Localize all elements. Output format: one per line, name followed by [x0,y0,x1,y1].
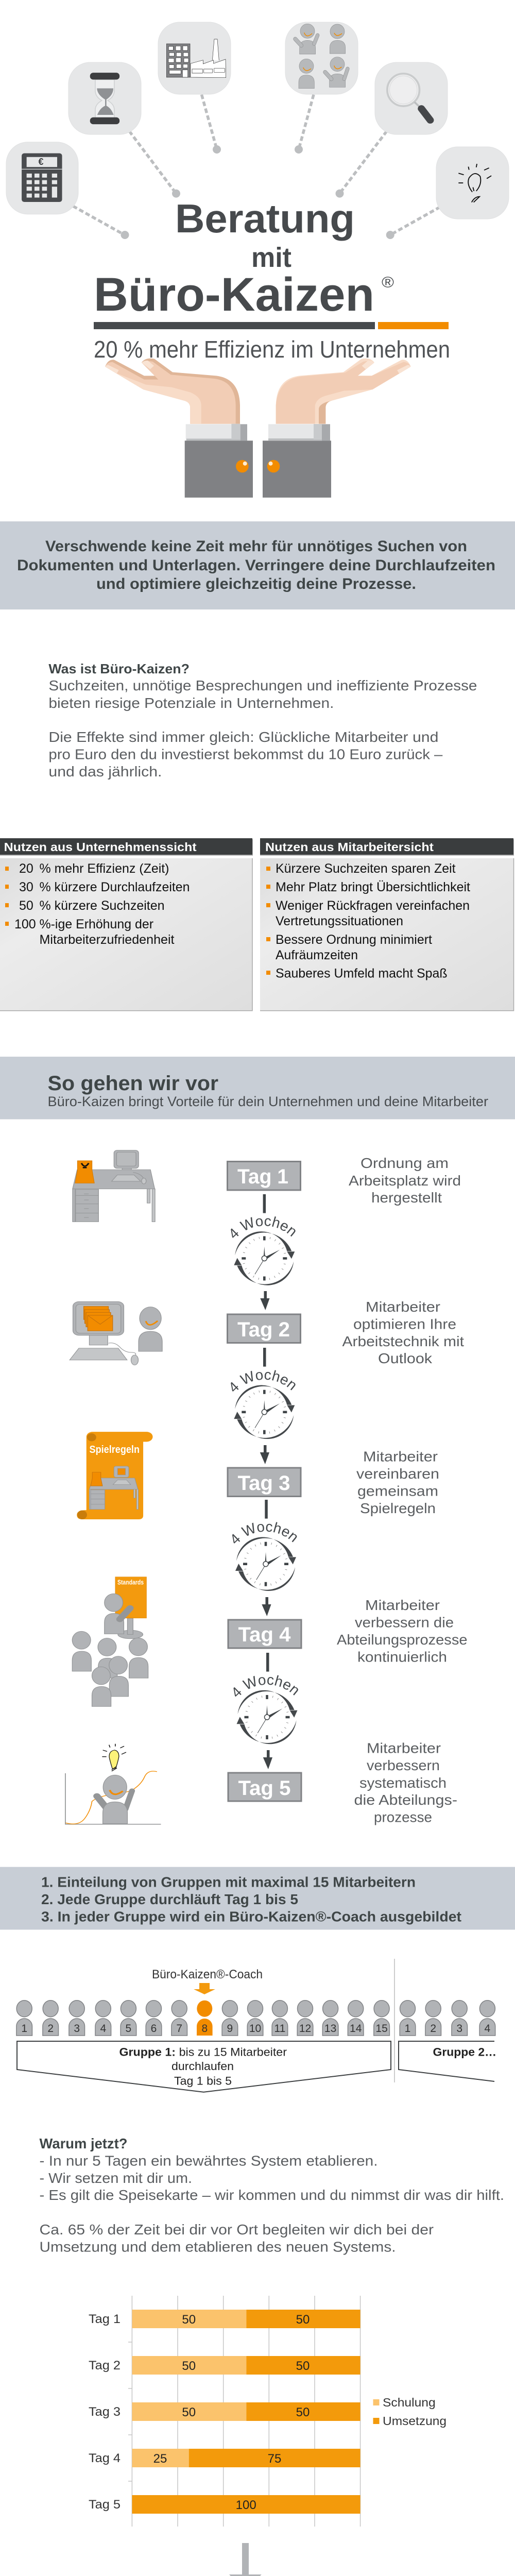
step: Tag 4: Tag 4 [238,1623,291,1646]
bar chart: Schulung vs Umsetzung [89,2296,447,2527]
left sleeve [185,440,253,498]
icon: email at computer [70,1302,162,1365]
step: Tag 2: Tag 2 [237,1318,290,1341]
step text: Tag 3 [356,1449,439,1516]
icon: magnifier [375,62,448,134]
step text: Tag 4: Mitarbeiter [365,1597,440,1613]
bar values: 50 [182,2313,196,2327]
title block [94,196,450,363]
icon: Spielregeln scroll [77,1432,153,1519]
heading: Was ist Büro-Kaizen? [48,661,190,676]
axis labels [89,2312,121,2512]
step text: Tag 5: Mitarbeiter [367,1740,441,1756]
step: Tag 1 [228,1161,301,1190]
icon: desk with computer [73,1150,155,1222]
icon: office and factory [158,22,231,94]
step text: Tag 5: prozesse [374,1809,432,1825]
paragraph: Die Effekte sind immer gleich: Glückliche Mitarbeiter und [48,729,438,745]
note [39,2222,434,2255]
panel body [0,858,252,1011]
connector [263,1194,266,1213]
panel header [0,838,253,856]
rules list [41,1874,461,1925]
step: Tag 5 [228,1773,301,1801]
legend [373,2396,447,2428]
bracket group 2 [399,2041,494,2081]
reasons: - In nur 5 Tagen ein bewährtes System etablieren. [39,2153,377,2169]
paragraph: pro Euro den du investierst bekommst du 10 Euro zurück – [48,747,443,762]
arrow: large down [229,2543,262,2576]
paragraph: bieten riesige Potenziale in Unternehmen. [48,695,334,711]
logo bar orange [378,322,449,329]
group 2 label: Gruppe 2… [433,2046,496,2059]
group 1 label: durchlaufen [171,2060,234,2073]
connector dots [121,145,394,239]
paragraph: und das jährlich. [48,764,162,779]
left cuff [186,424,247,440]
bullets [266,867,270,975]
step text: Tag 4: Abteilungsprozesse [337,1632,468,1648]
clock: 4 Wochen [231,1216,296,1285]
text block: Was ist Büro-Kaizen [48,661,477,779]
right cuff [268,424,330,440]
group 1 people: 4 [100,2023,106,2035]
rules list: 2. Jede Gruppe durchläuft Tag 1 bis 5 [41,1891,298,1907]
group 1 people [16,2001,389,2036]
axis labels: Tag 5 [89,2498,121,2512]
list: Aufräumzeiten [276,948,358,962]
list [14,861,190,947]
list: % mehr Effizienz (Zeit) [39,861,169,876]
icon: calculator: € [38,157,44,167]
axis labels: Tag 4 [89,2451,121,2465]
step: Tag 4 [228,1620,301,1648]
step text: Tag 2: Arbeitstechnik mit [342,1333,464,1349]
note: Ca. 65 % der Zeit bei dir vor Ort begleiten wir dich bei der [39,2222,434,2238]
group 1 people: 5 [126,2023,131,2035]
step text: Tag 3: gemeinsam [357,1483,438,1499]
banner: group rules [0,1867,515,1930]
step text: Tag 5 [354,1740,457,1825]
axis labels: Tag 1 [89,2312,121,2326]
title: mit: mit [251,242,291,273]
group 1 label: Tag 1 bis 5 [174,2074,232,2087]
group 1 label [119,2046,287,2087]
arrow [262,1597,271,1616]
connector [266,1653,269,1672]
group 1 people: 15 [375,2023,388,2035]
coach arrow [194,1983,215,1994]
group 1 people: 11 [274,2023,285,2035]
step text: Tag 4: verbessern die [355,1615,454,1631]
panel header: Nutzen aus Mitarbeitersicht [265,840,434,854]
diagram: groups [16,1959,496,2092]
group 1 people: 2 [47,2023,54,2035]
coach label: Büro-Kaizen®-Coach [152,1968,263,1981]
group 1 people: 14 [350,2023,362,2035]
reasons [39,2153,504,2203]
illustration: open hands [105,359,411,498]
panel header [260,838,514,856]
group 1 people: 7 [176,2023,182,2035]
rules list: 1. Einteilung von Gruppen mit maximal 15 Mitarbeitern [41,1874,416,1890]
connector [263,1348,266,1367]
arrow [260,1291,270,1310]
right hand [276,359,411,424]
step: Tag 5: Tag 5 [238,1777,290,1800]
icon: idea and growth curve [65,1744,161,1824]
title: Beratung: Beratung [175,196,355,241]
bar values: 50 [182,2359,196,2373]
step text: Tag 3: Spielregeln [360,1500,436,1516]
registered mark: ® [382,274,394,291]
step text: Tag 4 [337,1597,468,1665]
step text: Tag 1: hergestellt [371,1190,442,1206]
banner text [17,538,495,592]
step text: Tag 2 [342,1299,464,1366]
list: %-ige Erhöhung der [39,917,153,931]
subheading: Büro-Kaizen bringt Vorteile für dein Unternehmen und deine Mitarbeiter [47,1094,488,1109]
list: % kürzere Suchzeiten [39,899,165,913]
clock: 4 Wochen [232,1522,297,1591]
group 2 people [400,2001,495,2036]
step text: Tag 4: kontinuierlich [357,1649,447,1665]
group 1 label: Gruppe 1: [119,2046,176,2059]
step text: Tag 5: die Abteilungs- [354,1792,457,1808]
right button [267,460,280,472]
reasons: - Wir setzen mit dir um. [39,2170,192,2186]
text block: Warum jetzt [39,2136,504,2255]
bullets [5,867,9,926]
step text: Tag 3: Mitarbeiter [363,1449,438,1465]
list: 100 [14,917,36,931]
clock: 4 Wochen: 4 Wochen [231,1370,296,1392]
note: Umsetzung und dem etablieren des neuen Systems. [39,2239,396,2255]
connector [265,1500,268,1519]
left hand [105,359,240,424]
heading: Warum jetzt? [39,2136,128,2151]
icon: Standards presentation [72,1577,148,1706]
heading: So gehen wir vor [47,1072,218,1095]
group 1 people: 8 [201,2023,208,2035]
step text: Tag 5: verbessern [367,1757,440,1773]
bar values: 25 [153,2452,167,2466]
step: Tag 3: Tag 3 [238,1472,290,1495]
list: % kürzere Durchlaufzeiten [39,880,190,894]
bar values: 100 [236,2498,256,2512]
icon: happy team [285,22,358,94]
arrow [263,1750,272,1769]
legend: Schulung [383,2396,436,2409]
list [276,861,470,981]
group 1 people: 6 [151,2023,157,2035]
group 2 people: 3 [456,2023,462,2035]
step text: Tag 1 [349,1155,461,1206]
group 1 people: 12 [299,2023,311,2035]
icon: hourglass [68,62,141,134]
banner text: und optimiere gleichzeitig deine Prozesse. [96,575,416,592]
reasons: - Es gilt die Speisekarte – wir kommen und du nimmst dir was dir hilft. [39,2187,504,2203]
axis labels: Tag 3 [89,2405,121,2419]
group 2 people: 1 [405,2023,410,2035]
step: Tag 3 [228,1468,301,1496]
right sleeve [263,440,331,498]
banner: So gehen wir vor [0,1057,515,1119]
panel header: Nutzen aus Unternehmenssicht [4,840,197,854]
bar values: 50 [296,2313,310,2327]
banner text: Verschwende keine Zeit mehr für unnötiges Suchen von [45,538,467,555]
clock: 4 Wochen: 4 Wochen [232,1522,297,1544]
list: Sauberes Umfeld macht Spaß [276,967,448,981]
step text: Tag 5: systematisch [359,1775,447,1791]
grid [128,2296,360,2527]
step text: Tag 2: Outlook [378,1350,433,1366]
group 1 label: bis zu 15 Mitarbeiter [179,2046,287,2059]
list: Bessere Ordnung minimiert [276,933,432,947]
paragraph [48,677,477,779]
connector lines [73,95,440,235]
group 2 people: 4 [485,2023,491,2035]
title: Büro-Kaizen: Büro-Kaizen [94,268,374,321]
banner: intro [0,521,515,609]
scroll label: Spielregeln [90,1444,140,1455]
group 1 people: 3 [74,2023,80,2035]
list: Vertretungssituationen [276,914,403,928]
list: Kürzere Suchzeiten sparen Zeit [276,861,456,876]
bar values: 50 [182,2405,196,2419]
list: 30 [19,880,33,894]
panel: Nutzen aus Mitarbeitersicht [260,838,514,1011]
list: 50 [19,899,33,913]
panel body [260,858,514,1011]
group 1 people: 10 [249,2023,261,2035]
rules list: 3. In jeder Gruppe wird ein Büro-Kaizen®-Coach ausgebildet [41,1908,461,1925]
banner text: Dokumenten und Unterlagen. Verringere deine Durchlaufzeiten [17,557,495,574]
group 1 people: 1 [21,2023,27,2035]
list: Weniger Rückfragen vereinfachen [276,899,470,913]
step text: Tag 1: Ordnung am [360,1155,449,1171]
clock: 4 Wochen [231,1370,296,1439]
divider [394,1959,395,2082]
group 1 people: 9 [227,2023,233,2035]
list: Mehr Platz bringt Übersichtlichkeit [276,880,470,894]
step: Tag 1: Tag 1 [237,1165,288,1188]
step text: Tag 2: optimieren Ihre [353,1316,456,1332]
icon: calculator [6,142,78,214]
legend: Umsetzung [383,2414,447,2428]
left button [236,460,249,472]
list: Mitarbeiterzufriedenheit [39,933,175,947]
paragraph: Suchzeiten, unnötige Besprechungen und ineffiziente Prozesse [48,677,477,693]
arrow [260,1445,269,1464]
board label: Standards [117,1579,144,1586]
clock: 4 Wochen: 4 Wochen [233,1675,298,1697]
panel: Nutzen aus Unternehmenssicht [0,838,253,1011]
bar values: 50 [296,2405,310,2419]
header icons [6,22,509,239]
bar values: 75 [268,2452,281,2466]
bar values: 50 [296,2359,310,2373]
step text: Tag 2: Mitarbeiter [366,1299,440,1315]
bars [132,2310,360,2514]
group 1 people: 13 [324,2023,336,2035]
bracket group 1 [17,2041,391,2092]
subtitle: 20 % mehr Effizienz im Unternehmen [94,336,450,363]
axis labels: Tag 2 [89,2359,121,2372]
bar values [153,2313,310,2512]
step: Tag 2 [228,1314,301,1343]
step text: Tag 3: vereinbaren [356,1466,439,1482]
icon: light bulb idea [436,147,509,219]
group 2 people: 2 [430,2023,436,2035]
step text: Tag 1: Arbeitsplatz wird [349,1173,461,1189]
clock: 4 Wochen: 4 Wochen [231,1216,296,1238]
list: 20 [19,861,33,876]
clock: 4 Wochen [233,1675,298,1744]
logo bar dark [94,322,375,329]
